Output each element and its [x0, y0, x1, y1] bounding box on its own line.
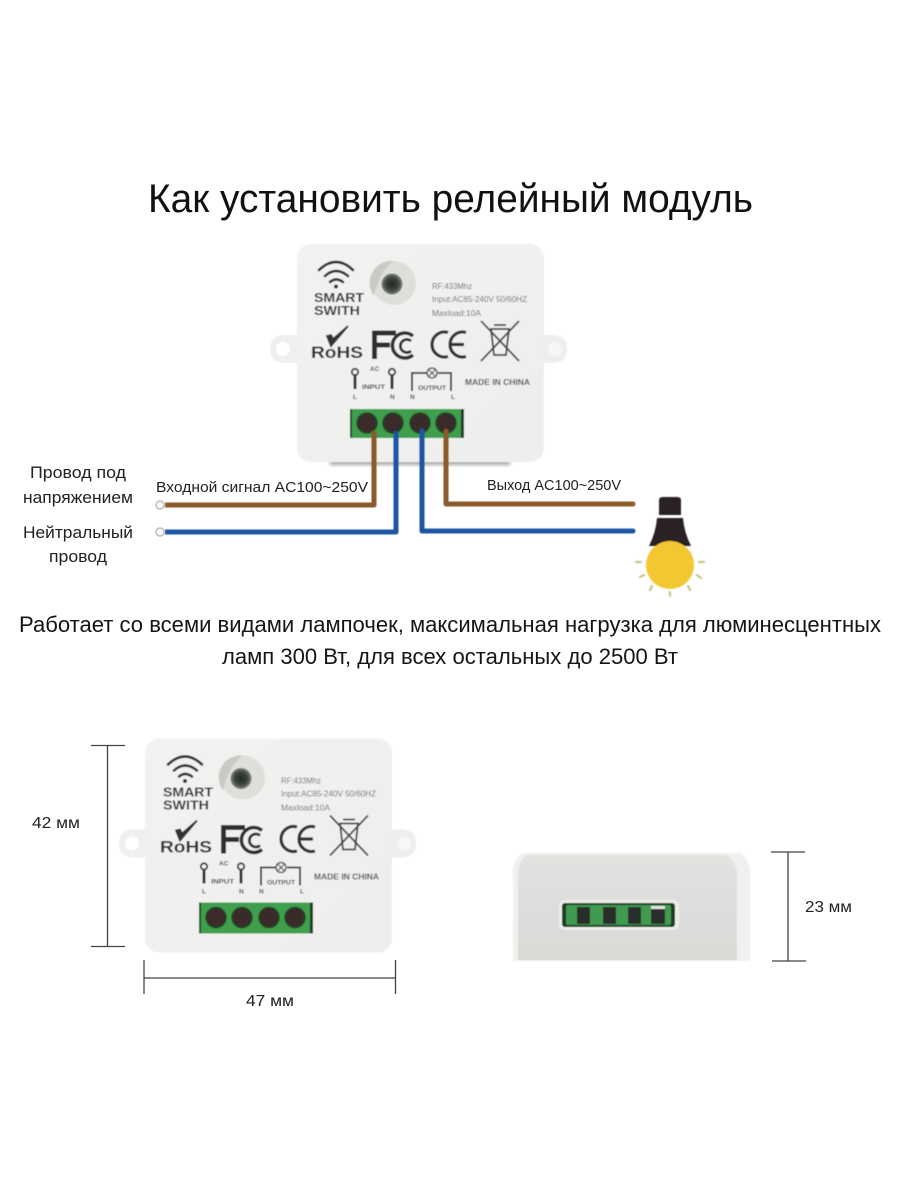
wire labels: Нейтральный — [23, 523, 133, 542]
button — [219, 755, 265, 800]
relay module: front view dimensions — [119, 738, 416, 952]
wires — [165, 431, 633, 532]
wire labels: напряжением — [23, 488, 133, 507]
wire labels: Провод под — [30, 463, 126, 482]
title: Как установить релейный модуль — [148, 177, 753, 221]
shadow under module — [330, 460, 510, 465]
wire labels — [23, 463, 133, 566]
output label: Выход AC100~250V — [487, 477, 621, 494]
icon: rohs — [160, 820, 212, 856]
label: smart switch: SWITH — [163, 798, 209, 812]
input and output markings: L — [353, 394, 357, 401]
compatibility note: ламп 300 Вт, для всех остальных до 2500 Вт — [222, 644, 678, 669]
wire: live input — [165, 431, 374, 505]
button — [370, 261, 416, 305]
icon: light bulb — [636, 497, 704, 596]
side body — [513, 853, 750, 961]
compatibility note — [19, 612, 881, 669]
icon: weee bin — [330, 816, 368, 856]
relay module: side view — [513, 853, 750, 961]
input and output markings: L — [300, 888, 304, 896]
icon: rohs: RoHS — [311, 343, 363, 362]
wire labels: провод — [49, 547, 107, 566]
input and output markings: N — [410, 394, 415, 401]
wire: neutral output — [422, 431, 633, 531]
dimension: width 47 mm: 47 мм — [246, 993, 294, 1010]
dimension: width 47 mm — [144, 960, 396, 1010]
mounting ears — [119, 830, 416, 858]
icon: rohs: RoHS — [160, 838, 212, 856]
label: smart switch: SMART — [314, 290, 364, 305]
side opening — [559, 900, 679, 930]
input and output markings: MADE IN CHINA — [314, 872, 379, 882]
specifications — [281, 776, 376, 812]
wire: neutral input — [165, 431, 396, 532]
input and output markings: N — [239, 888, 244, 896]
label: smart switch: SWITH — [314, 303, 360, 318]
input and output markings: N — [390, 394, 395, 401]
input and output markings: L — [202, 888, 206, 896]
input and output markings — [352, 366, 530, 401]
input and output markings: OUTPUT — [267, 880, 295, 886]
icon: ce — [281, 826, 315, 852]
input and output markings: OUTPUT — [418, 385, 446, 392]
label: smart switch — [314, 290, 364, 318]
terminal block — [350, 409, 464, 438]
dimension: height 42 mm: 42 мм — [32, 815, 80, 832]
input and output markings: AC — [370, 366, 380, 373]
specifications: RF:433Mhz — [281, 776, 321, 786]
compatibility note: Работает со всеми видами лампочек, максимальная нагрузка для люминесцентных — [19, 612, 881, 637]
module body — [297, 244, 544, 462]
wire: live output — [446, 431, 633, 504]
specifications — [432, 281, 527, 318]
icon: wifi — [168, 756, 202, 783]
icon: rohs — [311, 326, 363, 362]
relay module: wiring diagram — [270, 244, 567, 465]
icon: fcc — [374, 333, 413, 359]
input and output markings: INPUT — [211, 878, 234, 886]
mounting ears — [270, 335, 567, 363]
input and output markings: N — [259, 888, 264, 896]
terminal block — [199, 902, 313, 934]
icon: ce — [432, 332, 466, 357]
label: smart switch: SMART — [163, 784, 213, 800]
dimension: depth 23 mm — [771, 852, 852, 961]
specifications: RF:433Mhz — [432, 281, 472, 291]
input label: Входной сигнал AC100~250V — [156, 479, 368, 496]
icon: fcc — [224, 828, 262, 854]
specifications: Input:AC85-240V 50/60HZ — [281, 788, 376, 798]
input and output markings: L — [451, 394, 455, 401]
input and output markings: MADE IN CHINA — [465, 378, 530, 387]
module body — [145, 738, 392, 952]
input and output markings — [201, 860, 379, 896]
input and output markings: INPUT — [362, 384, 385, 391]
input and output markings: AC — [219, 860, 229, 868]
specifications: Maxload:10A — [281, 802, 330, 812]
terminal circles — [156, 501, 164, 536]
specifications: Maxload:10A — [432, 308, 481, 318]
label: smart switch — [163, 784, 213, 812]
specifications: Input:AC85-240V 50/60HZ — [432, 294, 527, 304]
icon: wifi — [319, 262, 353, 288]
icon: weee bin — [481, 321, 519, 361]
dimension: depth 23 mm: 23 мм — [805, 899, 852, 916]
dimension: height 42 mm — [32, 745, 125, 947]
